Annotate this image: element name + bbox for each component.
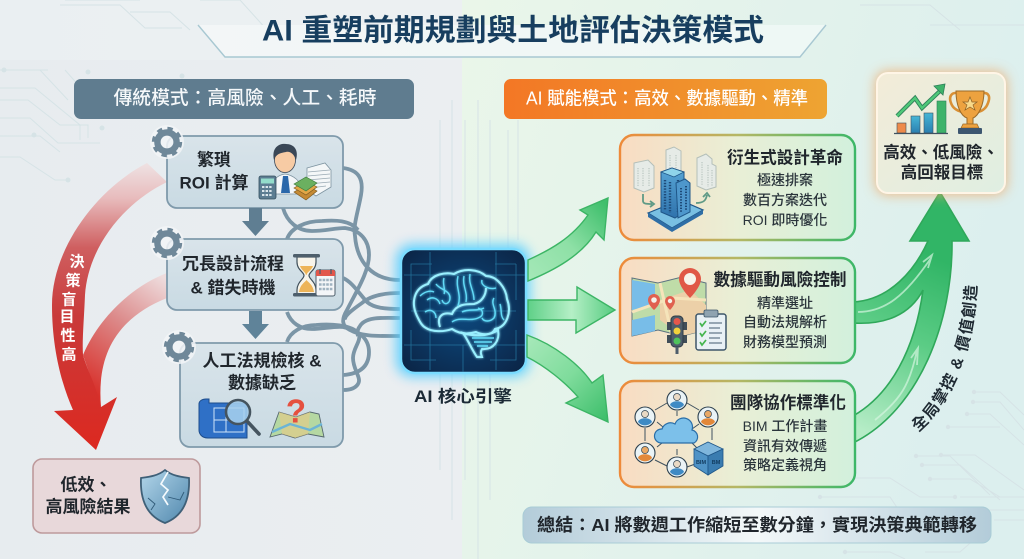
text: team collaboration xyxy=(730,392,846,473)
text: generative design: ROI 即時優化 xyxy=(743,212,827,228)
icon: person with calculator money and paper xyxy=(259,144,331,200)
arrow: step 2 to 3 xyxy=(242,311,269,339)
panel: generative design xyxy=(620,135,855,240)
text: manual compliance checks xyxy=(202,350,322,392)
icon: traffic light xyxy=(667,316,687,354)
icon: trophy xyxy=(950,91,989,134)
icon: team network with cloud: BM xyxy=(712,460,721,466)
text: data driven risk control: 精準選址 xyxy=(757,295,813,311)
icon: gear 3 xyxy=(162,330,196,364)
arrow: converging value arrow to goal xyxy=(853,192,969,443)
panel: ROI calculation xyxy=(167,136,343,208)
text: manual compliance checks: 人工法規檢核 & xyxy=(202,350,322,370)
summary bar xyxy=(523,507,991,543)
icon: buildings xyxy=(634,147,716,232)
text: low efficiency result xyxy=(46,474,130,516)
panel: team collaboration xyxy=(620,381,855,487)
icon: growth bar chart xyxy=(894,84,948,134)
panel: goal xyxy=(875,71,1007,195)
text: low efficiency result: 低效、 xyxy=(60,474,112,494)
icon: gear 1 xyxy=(150,125,184,159)
heading: traditional mode xyxy=(74,79,414,119)
text: generative design: 極速排案 xyxy=(757,172,813,188)
icon: brain xyxy=(414,270,509,357)
text: manual compliance checks: 數據缺乏 xyxy=(228,374,296,392)
text: generative design: 衍生式設計革命 xyxy=(727,148,843,168)
panel: low efficiency result xyxy=(33,459,200,533)
AI core engine xyxy=(396,244,530,406)
text: data driven risk control: 數據驅動風險控制 xyxy=(714,270,846,290)
icon: map with question mark: ? xyxy=(286,392,306,430)
text: goal: 高回報目標 xyxy=(901,162,983,182)
text: team collaboration: BIM 工作計畫 xyxy=(743,418,827,434)
icon: team network with cloud xyxy=(635,390,723,477)
text: team collaboration: 策略定義視角 xyxy=(743,457,827,473)
icon: checklist clipboard xyxy=(696,310,726,350)
tangled wires into AI core xyxy=(283,168,400,390)
label: AI core engine: AI 核心引擎 xyxy=(414,386,513,406)
text: data driven risk control: 財務模型預測 xyxy=(743,334,827,350)
text: team collaboration: 資訊有效傳遞 xyxy=(743,438,827,454)
arrow: step 1 to 2 xyxy=(242,208,269,236)
icon: map with question mark xyxy=(270,392,324,438)
text: ROI calculation: 繁瑣 xyxy=(197,150,231,170)
icon: cracked shield xyxy=(141,470,189,523)
text: long design process: 冗長設計流程 xyxy=(182,254,284,274)
icon: map pin xyxy=(679,268,701,298)
heading: AI enabled mode xyxy=(504,79,827,119)
text: ROI calculation: ROI 計算 xyxy=(180,172,248,192)
label: decision blindness: 決策盲目性高 xyxy=(59,252,85,364)
icon: hourglass and calendar xyxy=(293,254,335,296)
panel: manual compliance checks xyxy=(180,343,343,447)
text: long design process: & 錯失時機 xyxy=(190,278,276,298)
icon: map xyxy=(632,277,706,336)
title xyxy=(198,14,826,57)
arrow: to team collaboration xyxy=(527,335,608,422)
text: ROI calculation xyxy=(180,150,248,192)
heading: AI enabled mode: AI 賦能模式：高效、數據驅動、精準 xyxy=(526,88,808,108)
text: goal: 高效、低風險、 xyxy=(883,142,999,162)
icon: team network with cloud: BIM xyxy=(696,460,706,466)
heading: traditional mode: 傳統模式：高風險、人工、耗時 xyxy=(114,87,376,109)
text: generative design: 數百方案迭代 xyxy=(743,192,827,208)
text: team collaboration: 團隊協作標準化 xyxy=(730,392,846,412)
text: goal xyxy=(883,142,999,182)
red arrow: decision blindness xyxy=(52,163,167,450)
summary bar: 總結：AI 將數週工作縮短至數分鐘，實現決策典範轉移 xyxy=(537,515,977,535)
text: data driven risk control: 自動法規解析 xyxy=(743,314,827,330)
panel: data driven risk control xyxy=(620,258,855,363)
text: low efficiency result: 高風險結果 xyxy=(46,496,130,516)
label: global control and value creation: 全局掌控 & 價值創造 xyxy=(912,286,978,432)
title: AI 重塑前期規劃與土地評估決策模式 xyxy=(262,14,764,48)
icon: blueprint with magnifier xyxy=(199,399,259,438)
text: data driven risk control xyxy=(714,270,846,350)
arrow: to data risk control xyxy=(528,287,615,333)
icon: gear 2 xyxy=(150,226,184,260)
arrow: to generative design xyxy=(528,198,608,281)
text: generative design xyxy=(727,148,843,228)
text: long design process xyxy=(182,254,284,298)
panel: long design process xyxy=(167,239,343,310)
